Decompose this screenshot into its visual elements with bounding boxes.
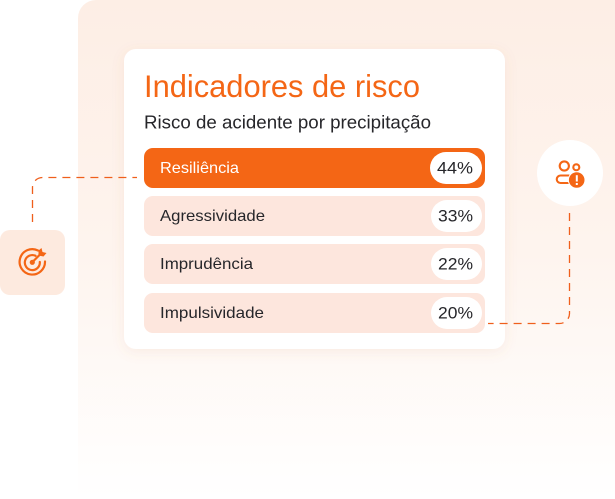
heading: Indicadores de risco bbox=[144, 68, 420, 104]
bar: Resiliência 44% bbox=[144, 148, 485, 188]
icon: users with warning bbox=[537, 140, 603, 206]
bar: Imprudência 22%: 22% bbox=[438, 256, 473, 274]
bar: Resiliência 44%: Resiliência bbox=[160, 160, 239, 177]
connector: target tile to first bar bbox=[32, 177, 137, 222]
bar: Resiliência 44%: 44% bbox=[437, 160, 473, 178]
bar: Agressividade 33% bbox=[144, 196, 485, 236]
bar: Agressividade 33%: Agressividade bbox=[160, 208, 265, 225]
bar: Impulsividade 20%: Impulsividade bbox=[160, 305, 264, 322]
bar: Impulsividade 20%: 20% bbox=[438, 304, 473, 322]
icon: target tile bbox=[0, 230, 65, 295]
subheading: Risco de acidente por precipitação bbox=[144, 112, 431, 132]
panel: risk indicators card bbox=[124, 49, 505, 349]
bar: Imprudência 22%: Imprudência bbox=[160, 256, 253, 273]
connector: last bar to users icon bbox=[488, 213, 570, 324]
bar: Agressividade 33%: 33% bbox=[438, 208, 473, 226]
bar: Imprudência 22% bbox=[144, 244, 485, 284]
bar: Impulsividade 20% bbox=[144, 293, 485, 333]
